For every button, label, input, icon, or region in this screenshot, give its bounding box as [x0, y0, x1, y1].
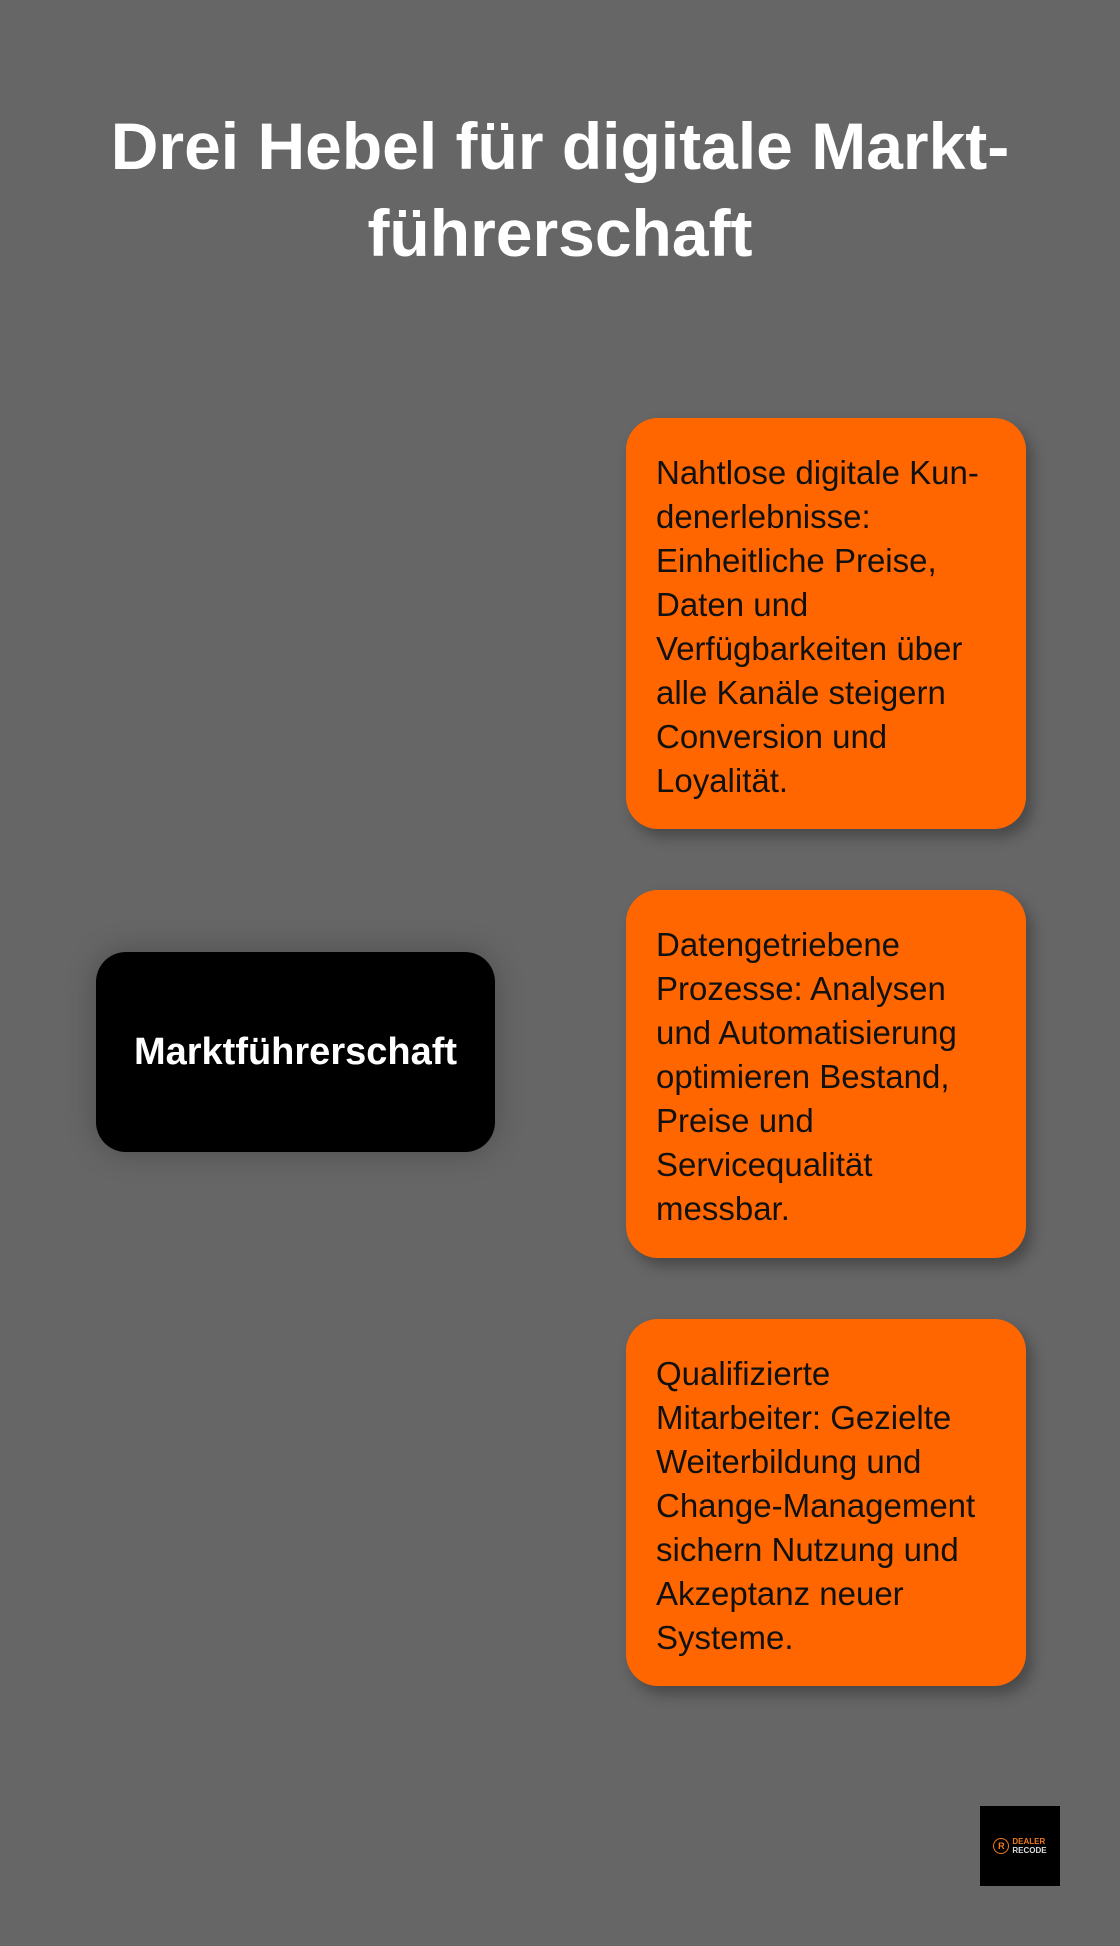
panel: data-driven processes: Preise und — [656, 1102, 814, 1139]
panel: qualified employees: Akzeptanz neuer — [656, 1575, 904, 1612]
panel: qualified employees: Qualifizierte — [656, 1355, 830, 1392]
panel: data-driven processes: Prozesse: Analysen — [656, 970, 946, 1007]
logo: Dealer Recode — [980, 1806, 1060, 1886]
panel: data-driven processes: und Automatisierung — [656, 1014, 957, 1051]
panel: customer experiences: Einheitliche Preise, — [656, 542, 937, 579]
panel: customer experiences — [626, 418, 1026, 829]
panel: customer experiences: denerlebnisse: — [656, 498, 871, 535]
logo: Dealer Recode: DEALER — [1012, 1837, 1045, 1846]
panel: data-driven processes: messbar. — [656, 1190, 790, 1227]
panel: data-driven processes — [626, 890, 1026, 1258]
title: führerschaft — [367, 196, 753, 270]
central box: Marktführerschaft — [96, 952, 495, 1152]
panel: data-driven processes: optimieren Bestand, — [656, 1058, 950, 1095]
panel: data-driven processes: Datengetriebene — [656, 926, 900, 963]
central box: Marktführerschaft: Marktführerschaft — [134, 1030, 457, 1072]
panel: qualified employees: Mitarbeiter: Gezielte — [656, 1399, 951, 1436]
panel: customer experiences: alle Kanäle steigern — [656, 674, 946, 711]
panel: customer experiences: Conversion und — [656, 718, 887, 755]
title: Drei Hebel für digitale Markt- — [111, 109, 1009, 183]
panel: customer experiences: Loyalität. — [656, 762, 788, 799]
panel: qualified employees — [626, 1319, 1026, 1686]
panel: data-driven processes: Servicequalität — [656, 1146, 872, 1183]
panel: qualified employees: Systeme. — [656, 1619, 794, 1656]
panel: qualified employees: sichern Nutzung und — [656, 1531, 959, 1568]
logo: Dealer Recode: RECODE — [1012, 1846, 1047, 1855]
panel: customer experiences: Verfügbarkeiten über — [656, 630, 962, 667]
panel: customer experiences: Daten und — [656, 586, 808, 623]
panel: qualified employees: Change-Management — [656, 1487, 975, 1524]
panel: qualified employees: Weiterbildung und — [656, 1443, 921, 1480]
logo: Dealer Recode: R — [998, 1841, 1005, 1851]
panel: customer experiences: Nahtlose digitale Kun- — [656, 454, 979, 491]
title — [111, 109, 1009, 270]
